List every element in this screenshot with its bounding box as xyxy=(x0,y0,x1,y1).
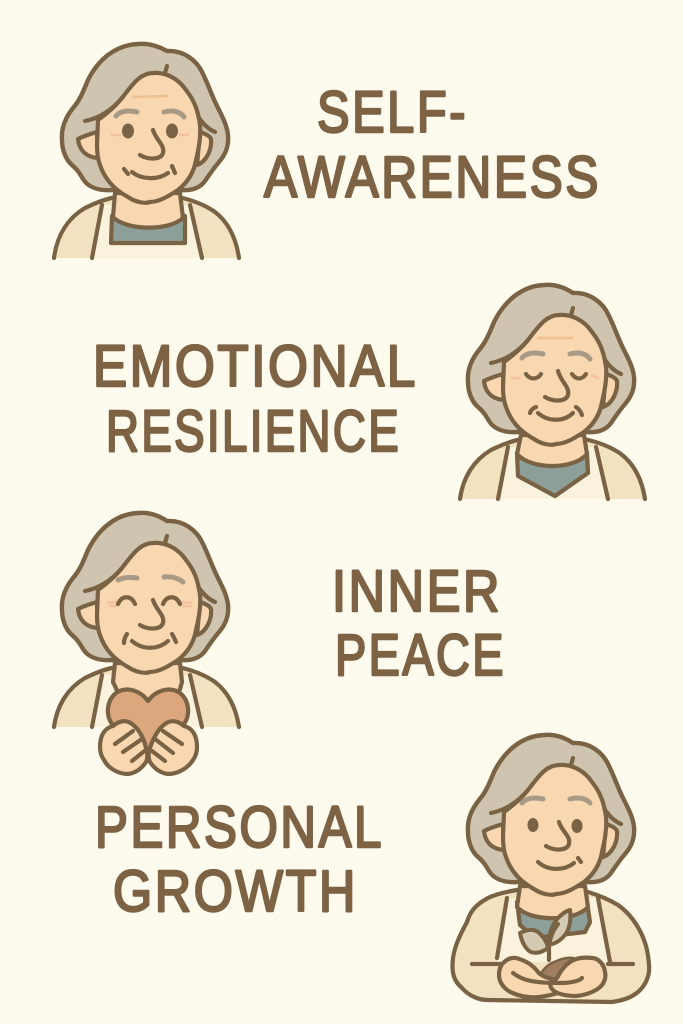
forehead wrinkle xyxy=(133,96,168,97)
hands xyxy=(499,958,605,997)
seedling xyxy=(520,910,570,960)
heading: emotional resilience: RESILIENCE xyxy=(106,399,401,464)
torso with apron xyxy=(460,435,645,499)
figure: inner peace woman holding heart xyxy=(54,513,239,774)
hair xyxy=(62,513,228,660)
hair strands xyxy=(491,308,621,374)
heading: self-awareness: AWARENESS xyxy=(264,145,601,210)
hair xyxy=(468,735,634,882)
heading: personal growth: GROWTH xyxy=(113,859,358,924)
heading: inner peace: INNER xyxy=(332,559,502,624)
closed eyes, nose and smile xyxy=(526,371,586,420)
hair strands xyxy=(85,66,215,132)
nose and smile xyxy=(538,822,581,869)
hair strands xyxy=(85,536,215,602)
hair strands xyxy=(491,758,621,824)
figure: self-awareness woman xyxy=(54,44,239,258)
heading: emotional resilience xyxy=(93,334,418,464)
heading: personal growth: PERSONAL xyxy=(95,795,384,860)
blush xyxy=(108,602,192,606)
figure: personal growth woman holding seedling xyxy=(452,735,649,1002)
figure: emotional resilience woman xyxy=(460,285,645,499)
eyebrows xyxy=(118,577,183,582)
ears xyxy=(78,132,211,165)
soil mound xyxy=(537,958,573,980)
torso with arms and apron xyxy=(452,886,649,1002)
heading: inner peace: PEACE xyxy=(335,623,506,688)
eyebrows xyxy=(116,111,184,117)
ears xyxy=(484,374,617,407)
heading: inner peace xyxy=(332,559,506,688)
eyes xyxy=(528,818,582,833)
right hand xyxy=(148,721,197,774)
face xyxy=(97,543,200,673)
blush xyxy=(112,134,188,136)
ears xyxy=(484,824,617,857)
heading: self-awareness: SELF- xyxy=(317,80,468,145)
heading: self-awareness xyxy=(264,80,601,210)
blush xyxy=(512,376,598,378)
head xyxy=(484,758,621,895)
ears xyxy=(78,602,211,635)
face xyxy=(503,315,606,445)
heart xyxy=(108,690,188,755)
hair xyxy=(62,44,228,190)
heading: emotional resilience: EMOTIONAL xyxy=(93,334,418,399)
eyebrows xyxy=(522,798,590,803)
heading: personal growth xyxy=(95,795,384,924)
face xyxy=(97,73,200,203)
smiling eyes, nose and smile xyxy=(118,597,180,648)
hair xyxy=(468,285,634,432)
eyes xyxy=(122,124,178,138)
torso with apron xyxy=(54,193,239,258)
eyebrows xyxy=(522,353,590,359)
forehead wrinkle xyxy=(538,337,572,339)
left hand xyxy=(100,721,148,774)
face xyxy=(503,765,606,895)
torso with apron xyxy=(54,663,239,727)
nose and smile xyxy=(124,130,175,178)
